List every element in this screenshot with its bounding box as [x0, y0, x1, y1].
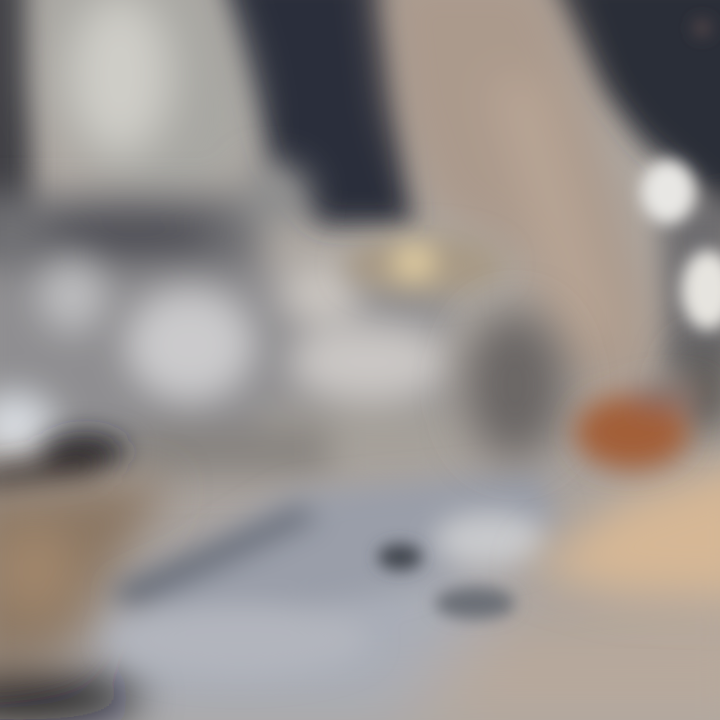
- panel: peach sand: [530, 455, 720, 600]
- panel: blue grey fabric: [110, 470, 560, 676]
- icon: white spheres: [641, 160, 720, 330]
- panel: grey and white folded cloth: [0, 163, 460, 475]
- panel: beige column: [378, 0, 655, 385]
- dark shadow spot left: [0, 434, 127, 495]
- icon: golden highlight: [345, 235, 505, 295]
- dark upper backdrop: [0, 0, 720, 370]
- background: lower floor: [0, 440, 720, 720]
- distant reddish light: [693, 19, 711, 37]
- icon: orange glass: [574, 383, 708, 470]
- panel: grey metal object right: [463, 310, 720, 460]
- panel: brown table left: [0, 480, 170, 720]
- panel: white cloth upper left: [35, 0, 250, 205]
- small dark objects: [378, 544, 515, 619]
